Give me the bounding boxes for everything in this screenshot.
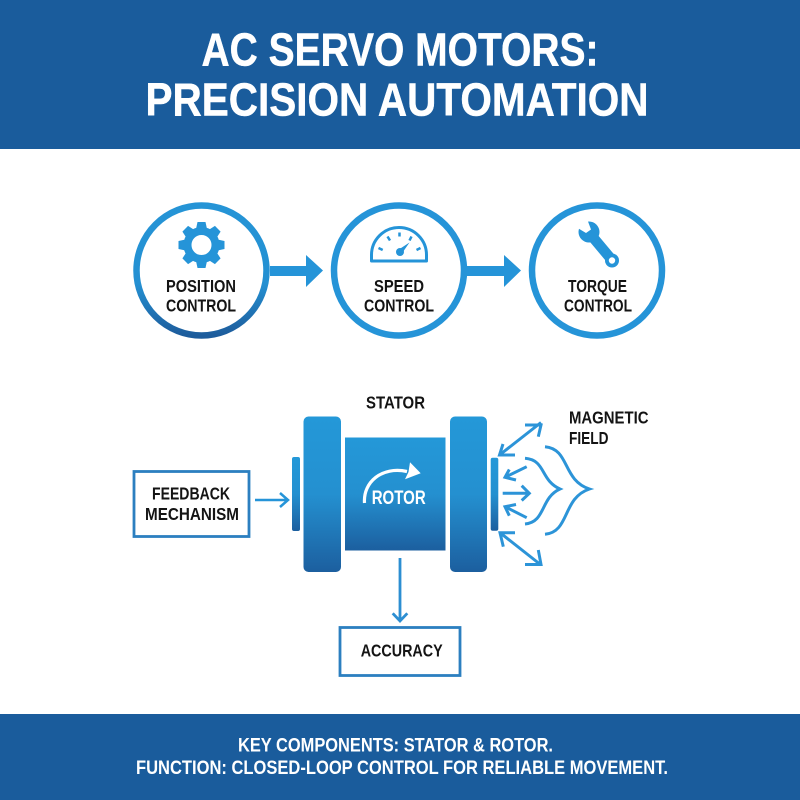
accuracy box — [340, 628, 460, 676]
label: accuracy: ACCURACY — [361, 641, 443, 661]
label: rotor: ROTOR — [372, 488, 426, 509]
panel: position control — [136, 206, 266, 336]
panel: speed control — [334, 206, 464, 336]
footer text — [136, 736, 668, 779]
label: torque control: TORQUE — [568, 276, 627, 296]
label: magnetic field: MAGNETIC — [569, 407, 649, 427]
feedback mechanism box — [134, 472, 249, 536]
label: feedback mechanism: MECHANISM — [145, 504, 239, 524]
magnetic field arrows — [500, 422, 590, 565]
title: PRECISION AUTOMATION — [146, 74, 648, 126]
label: position control — [166, 276, 236, 316]
label: speed control — [364, 276, 434, 316]
motor diagram — [292, 416, 498, 572]
label: torque control: CONTROL — [564, 296, 632, 316]
stator: left block — [304, 416, 341, 572]
label: speed control: CONTROL — [364, 296, 434, 316]
panel: torque control — [532, 206, 662, 336]
label: position control: POSITION — [166, 276, 236, 296]
arrow: rotor to accuracy — [393, 558, 407, 621]
stator: left end cap — [292, 457, 300, 531]
arrow: feedback to motor — [255, 493, 288, 507]
label: torque control — [564, 276, 632, 316]
label: magnetic field: FIELD — [569, 428, 608, 448]
icon: rotation arrow — [364, 470, 407, 503]
arrow: position to speed — [270, 255, 323, 287]
label: stator: STATOR — [366, 393, 425, 413]
magnetic field curves — [525, 458, 560, 524]
label: speed control: SPEED — [374, 276, 424, 296]
title: AC SERVO MOTORS: — [202, 24, 598, 76]
footer text: KEY COMPONENTS: STATOR & ROTOR. — [238, 736, 553, 756]
icon: speedometer — [372, 228, 426, 261]
label: magnetic field — [569, 407, 649, 448]
stator: right end cap — [491, 458, 498, 531]
label: position control: CONTROL — [166, 296, 236, 316]
arrow: speed to torque — [467, 255, 521, 287]
title — [146, 24, 648, 126]
rotor — [345, 438, 446, 550]
footer banner — [0, 714, 800, 800]
header banner — [0, 0, 800, 149]
label: feedback mechanism — [145, 483, 239, 524]
icon: wrench — [575, 218, 619, 268]
stator: right block — [450, 416, 487, 572]
icon: gear — [178, 222, 224, 268]
footer text: FUNCTION: CLOSED-LOOP CONTROL FOR RELIABLE MOVEMENT. — [136, 758, 668, 779]
label: feedback mechanism: FEEDBACK — [152, 483, 230, 503]
